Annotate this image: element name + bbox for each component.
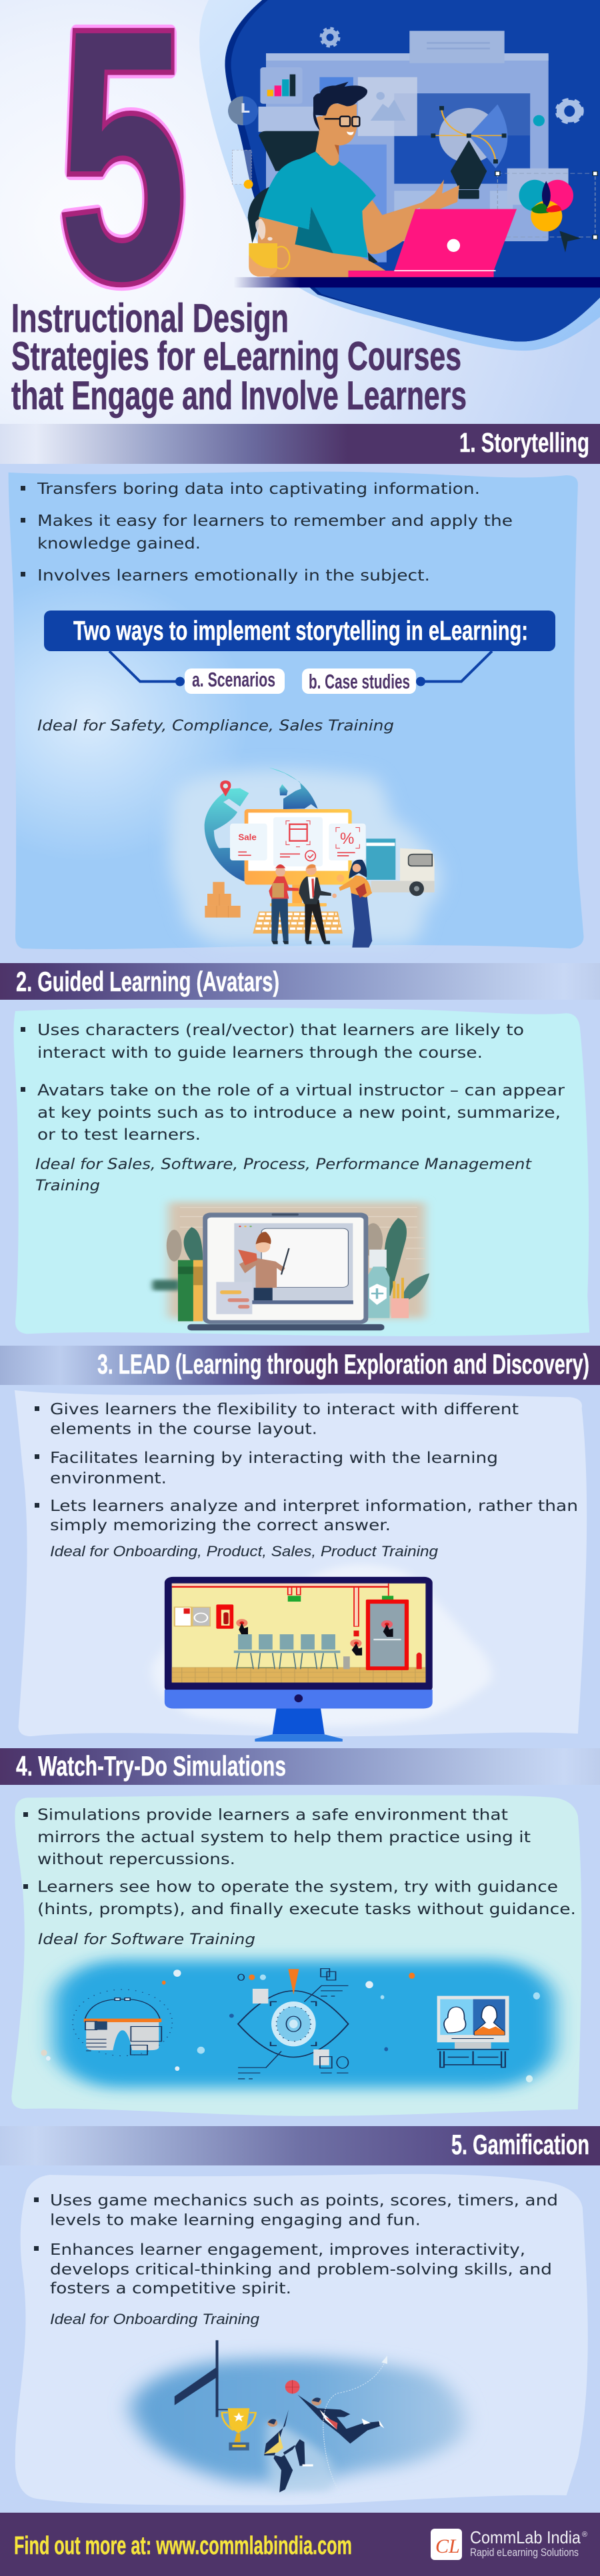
section 3: LEAD: [0, 1346, 600, 1742]
keyboard: [253, 912, 343, 934]
simulations bullets: mirrors the actual system to help them practice using it: [37, 1829, 531, 1846]
guided learning bullets: interact with to guide learners through the course.: [37, 1044, 483, 1062]
panel: simulations: [11, 1795, 581, 2116]
hand: [417, 179, 459, 222]
colour circles: [495, 171, 597, 253]
storytelling bullets: Transfers boring data into captivating information.: [37, 481, 480, 498]
steam and mug: [249, 219, 289, 277]
LEAD bullets: Gives learners the flexibility to interact with different: [50, 1401, 519, 1418]
guided learning bullets: or to test learners.: [37, 1126, 201, 1144]
storytelling bullets: Involves learners emotionally in the subject.: [37, 567, 430, 585]
option: case studies: [302, 668, 416, 694]
simulations bullets: Simulations provide learners a safe environment that: [37, 1806, 508, 1824]
panel: storytelling: [9, 472, 584, 949]
logo text: CommLab India: [470, 2527, 581, 2547]
jumping man one: [264, 2409, 313, 2493]
laptop: [348, 209, 517, 277]
map pin: [220, 780, 231, 796]
video call icon: [437, 1996, 509, 2067]
gamification bullets: levels to make learning engaging and fun.: [50, 2211, 421, 2229]
cards: %: [340, 830, 354, 848]
figure: [250, 82, 427, 277]
illustration: fire safety scene on monitor: [152, 1564, 491, 1742]
section heading: guided learning: [0, 963, 600, 1000]
LEAD bullets: simply memorizing the correct answer.: [50, 1517, 391, 1534]
globe: [205, 768, 318, 882]
floating dots: [41, 1969, 540, 2082]
footer: [0, 2513, 600, 2576]
clock icon: [228, 96, 258, 125]
ideal for note: Ideal for Onboarding, Product, Sales, Product Training: [50, 1543, 439, 1560]
panel: gamification: [15, 2174, 588, 2505]
ideal for note: Ideal for Sales, Software, Process, Performance Management: [35, 1156, 533, 1173]
designer figure with chair and mug: [248, 82, 427, 277]
logo text: Rapid eLearning Solutions: [470, 2546, 579, 2559]
simulations bullets: without repercussions.: [37, 1851, 235, 1868]
logo text: ®: [582, 2531, 587, 2539]
option: scenarios: a. Scenarios: [192, 668, 275, 691]
dashed note: [232, 150, 253, 189]
illustration: simulation icons on blue: [41, 1960, 555, 2087]
guided learning bullets: at key points such as to introduce a new point, summarize,: [37, 1104, 561, 1122]
trophy: [222, 2408, 255, 2451]
connectors: [109, 651, 492, 685]
hero illustration: designer at laptop: [199, 0, 600, 351]
section heading: gamification: [0, 2126, 600, 2165]
designer windows: [259, 31, 569, 263]
section heading: simulations: [0, 1748, 600, 1785]
storytelling bullets: Makes it easy for learners to remember and apply the: [37, 513, 513, 530]
section 2: guided learning: [0, 963, 600, 1336]
logo icon: CL: [435, 2535, 460, 2557]
illustration: businessmen playing basketball: [130, 2340, 464, 2493]
computer monitor: [245, 809, 352, 906]
gamification bullets: Uses game mechanics such as points, scores, timers, and: [50, 2192, 558, 2209]
title: [11, 296, 467, 418]
gamification bullets: develops critical-thinking and problem-solving skills, and: [50, 2261, 552, 2278]
guided learning bullets: Uses characters (real/vector) that learners are likely to: [37, 1022, 524, 1039]
panel: LEAD: [15, 1390, 587, 1736]
eye icon: [238, 1969, 348, 2079]
businessman: [299, 864, 337, 944]
ideal for note: Ideal for Safety, Compliance, Sales Training: [37, 718, 394, 734]
section heading: simulations: 4. Watch-Try-Do Simulations: [16, 1750, 286, 1782]
LEAD bullets: [35, 1401, 578, 1534]
ideal for note: Ideal for Software Training: [38, 1932, 255, 1948]
cards: [230, 817, 366, 866]
guided learning bullets: Avatars take on the role of a virtual instructor – can appear: [37, 1082, 565, 1100]
hero blob: [199, 0, 600, 351]
storytelling bullets: [21, 481, 513, 585]
two ways banner: [44, 611, 555, 651]
gamification bullets: fosters a competitive spirit.: [50, 2280, 291, 2297]
ideal for note: [35, 1156, 533, 1194]
LEAD bullets: Lets learners analyze and interpret information, rather than: [50, 1498, 578, 1515]
gamification bullets: Enhances learner engagement, improves interactivity,: [50, 2241, 525, 2259]
LEAD bullets: Facilitates learning by interacting with the learning: [50, 1450, 498, 1467]
section heading: storytelling: [0, 424, 600, 464]
paper plane trail: [323, 2355, 387, 2491]
ideal for note: Ideal for Onboarding Training: [50, 2311, 260, 2327]
desk: [233, 277, 600, 287]
section 1: storytelling: [0, 424, 600, 949]
illustration: avatar instructor on laptop: [152, 1202, 429, 1330]
cards: Sale: [238, 832, 257, 842]
panel: guided learning: [14, 1008, 589, 1336]
footer link: Find out more at: www.commlabindia.com: [14, 2532, 352, 2560]
small gear icon: [321, 29, 339, 46]
simulations bullets: (hints, prompts), and finally execute tasks without guidance.: [37, 1901, 576, 1918]
worker: [269, 864, 299, 944]
title: Instructional Design: [11, 296, 289, 341]
section heading: guided learning: 2. Guided Learning (Avatars): [16, 966, 279, 997]
woman with folder: [337, 860, 372, 948]
section 4: simulations: [0, 1748, 600, 2116]
logo icon: [431, 2529, 462, 2560]
section heading: LEAD: [0, 1346, 600, 1385]
section 5: gamification: [0, 2126, 600, 2505]
jumping man two: [298, 2395, 384, 2443]
chair: [248, 131, 378, 265]
simulations bullets: Learners see how to operate the system, try with guidance: [37, 1878, 558, 1896]
basketball: [285, 2380, 300, 2393]
gamification bullets: [34, 2192, 558, 2297]
guided learning bullets: [21, 1022, 565, 1144]
option: scenarios: [185, 668, 285, 694]
option: case studies: b. Case studies: [309, 670, 410, 693]
logo text: [470, 2527, 587, 2559]
ideal for note: Training: [35, 1178, 100, 1194]
truck: [366, 838, 435, 896]
pen tool: [431, 105, 507, 199]
LEAD bullets: environment.: [50, 1470, 167, 1488]
cardboard boxes: [205, 882, 241, 918]
LEAD bullets: elements in the course layout.: [50, 1421, 317, 1438]
simulations bullets: [23, 1806, 576, 1918]
illustration: business team with globe: [169, 768, 441, 948]
storytelling bullets: knowledge gained.: [37, 535, 201, 553]
headset icon: [73, 1989, 172, 2056]
right gear: [533, 100, 581, 126]
